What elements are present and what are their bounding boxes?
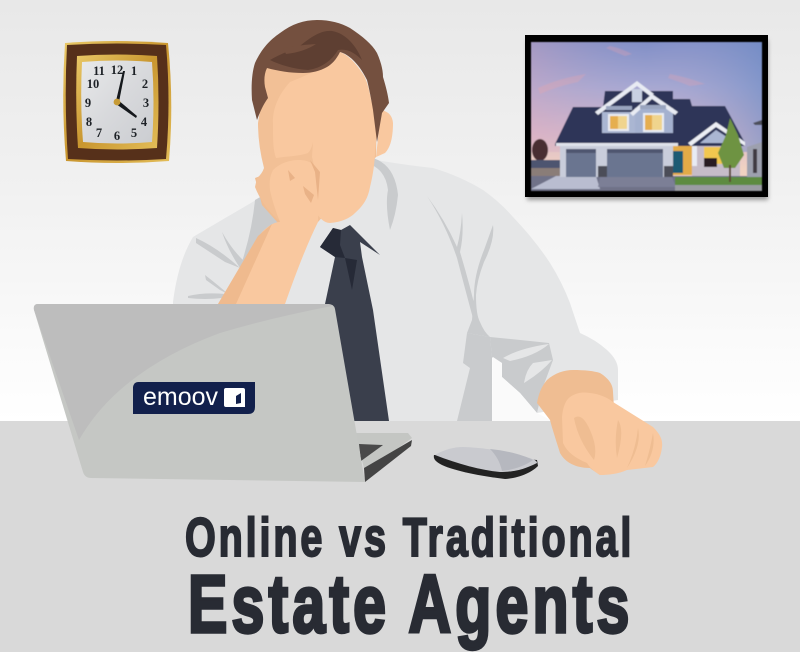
photo frame xyxy=(525,35,768,197)
roof xyxy=(555,91,745,146)
title line 1: Online vs Traditional xyxy=(185,508,631,569)
photo of house xyxy=(531,42,762,191)
clock numerals: 6 xyxy=(114,129,120,143)
forearm shade xyxy=(218,224,272,304)
right hand fist xyxy=(537,370,662,475)
mouse bottom xyxy=(434,455,538,479)
hair highlights xyxy=(270,31,362,70)
face xyxy=(273,52,377,223)
clock numerals: 2 xyxy=(142,77,148,91)
gable trims xyxy=(595,81,654,115)
garage doors xyxy=(566,149,596,177)
clock numerals: 10 xyxy=(87,77,99,91)
lawn xyxy=(675,177,762,185)
clock numerals: 9 xyxy=(85,96,91,110)
clock numerals: 5 xyxy=(131,126,137,140)
framed house photo xyxy=(525,35,768,200)
businessman figure xyxy=(173,20,618,421)
shirt fold shadows xyxy=(188,158,553,421)
wall clock xyxy=(63,41,171,163)
porch xyxy=(673,146,694,175)
clock numerals: 8 xyxy=(86,115,92,129)
clock numerals: 12 xyxy=(111,63,123,77)
necktie xyxy=(320,225,389,421)
knuckle creases xyxy=(574,416,654,468)
mouse xyxy=(434,447,538,479)
shirt xyxy=(173,160,618,421)
hair xyxy=(252,20,389,142)
head side shade xyxy=(255,52,377,222)
clock frame xyxy=(63,41,171,163)
upper windows xyxy=(608,114,629,131)
laptop side edge xyxy=(364,440,412,482)
white gap under arm xyxy=(492,357,552,421)
fist xyxy=(562,392,662,475)
sleeve fold xyxy=(490,337,553,413)
garage wall xyxy=(556,143,678,146)
clock numerals: 1 xyxy=(131,64,137,78)
laptop xyxy=(34,304,412,482)
wrist shade xyxy=(537,370,615,475)
right side creases xyxy=(427,196,478,322)
desk xyxy=(0,421,800,652)
laptop base xyxy=(355,433,412,472)
clock numerals: 7 xyxy=(96,126,102,140)
clock inner bezel xyxy=(76,54,158,150)
title xyxy=(185,508,631,650)
clock numerals: 4 xyxy=(141,115,148,129)
clock numerals xyxy=(85,63,149,143)
logo house icon xyxy=(224,388,245,407)
upper walls xyxy=(602,112,635,133)
emoov logo xyxy=(133,382,255,414)
body fold column xyxy=(457,333,492,421)
laptop keyboard xyxy=(359,444,383,461)
neck shade xyxy=(255,165,318,226)
laptop lid shade xyxy=(34,304,332,440)
frame shadow xyxy=(527,40,768,200)
clock numerals: 11 xyxy=(93,64,105,78)
mouse top xyxy=(435,447,537,472)
tree right xyxy=(718,118,744,168)
left trees and fence xyxy=(532,139,548,161)
wall background xyxy=(0,0,800,421)
fist xyxy=(270,160,318,222)
title line 2: Estate Agents xyxy=(188,559,629,650)
forearm xyxy=(218,222,318,304)
laptop lid xyxy=(34,304,365,482)
clock hands xyxy=(114,71,137,118)
logo wordmark: emoov xyxy=(143,383,218,411)
sleeve highlight petals xyxy=(503,344,552,383)
neighbour house xyxy=(747,142,762,177)
driveway xyxy=(531,176,762,191)
clock dial xyxy=(81,60,154,144)
clock numerals: 3 xyxy=(143,96,149,110)
finger creases xyxy=(288,160,320,203)
ear xyxy=(376,110,393,157)
